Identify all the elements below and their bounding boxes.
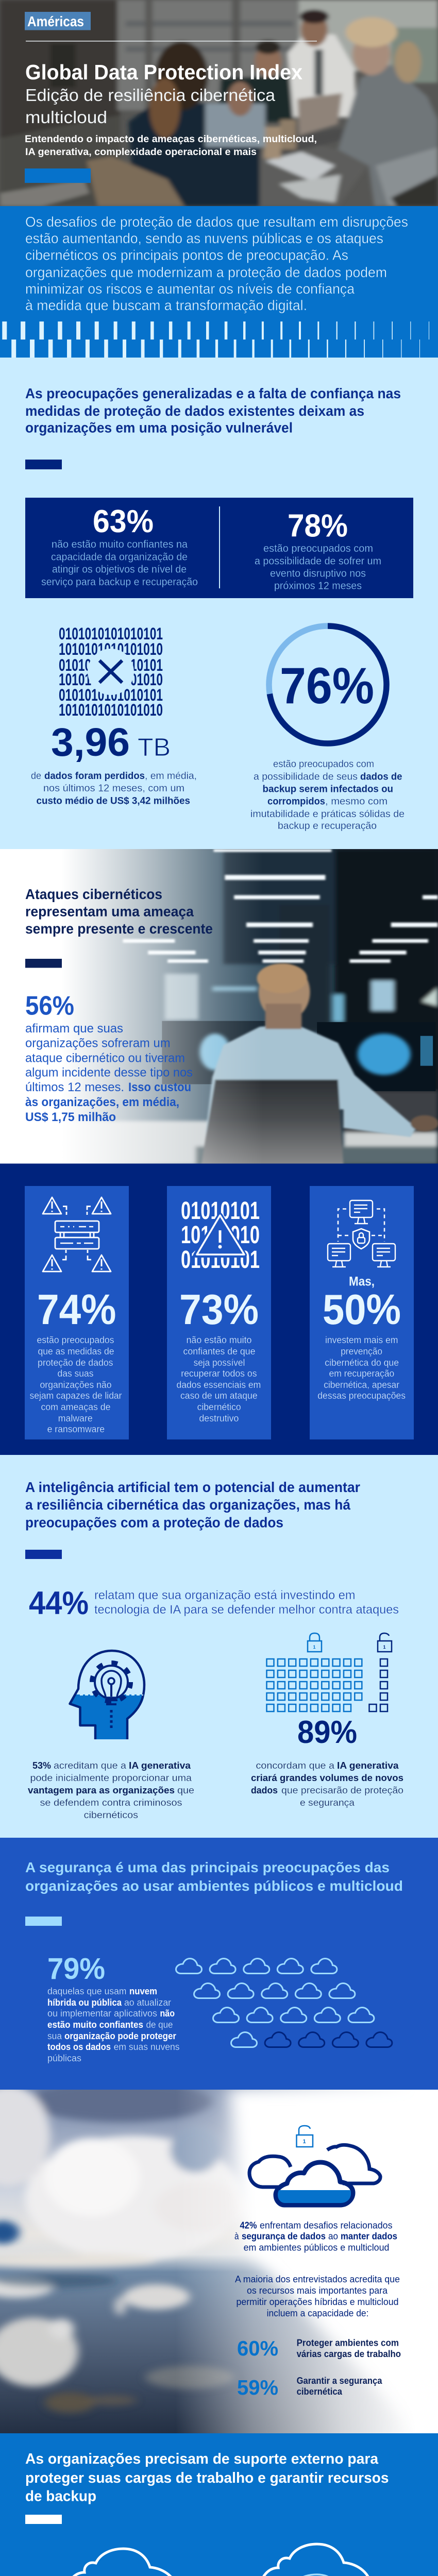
caption: 76%: imutabilidade e práticas sólidas de	[250, 808, 405, 820]
section heading: proteger suas cargas de trabalho e garantir recursos	[25, 2470, 389, 2486]
hero photo: team meeting around a table	[0, 0, 438, 206]
stat caption: 79%: organização pode proteger	[64, 2030, 176, 2041]
text: 89% generative AI: concordam que a	[256, 1760, 335, 1771]
stat caption: 79%: híbrida ou pública	[47, 1997, 122, 2008]
panel: navy band with three stat cards	[0, 1163, 438, 1455]
stat caption: 79%: ao atualizar	[124, 1997, 171, 2008]
stat: 3,96 TB: custo médio de US$ 3,42 milhões	[36, 795, 190, 807]
intro paragraph: organizações que modernizam a proteção de dados podem	[25, 264, 387, 280]
icon: binary data with X: 0101010101010101	[59, 624, 163, 643]
card: 73% recovery confidence: 73%	[179, 1285, 259, 1333]
text: 53% generative AI: pode inicialmente proporcionar uma	[30, 1772, 192, 1783]
stat: 44%: tecnologia de IA para se defender melhor contra ataques	[94, 1603, 399, 1617]
panel: artificial intelligence section	[0, 1455, 438, 1838]
panel: cyber attacks text over photo	[25, 886, 213, 1124]
card: 50% prevention investment: em recuperação	[329, 1368, 394, 1379]
text: 53% generative AI: que	[177, 1785, 194, 1795]
text: 53% generative AI: vantagem para as organizações	[28, 1785, 175, 1795]
card: 50% prevention investment	[310, 1186, 414, 1439]
text: 42% data security: em ambientes públicos e multicloud	[244, 2242, 390, 2253]
card: 73% recovery confidence: destrutivo	[199, 1413, 239, 1423]
card: 50% prevention investment: Mas,	[349, 1275, 375, 1289]
stat: 59% cyber security	[237, 2376, 382, 2399]
section heading: sempre presente e crescente	[25, 921, 213, 937]
stat caption: 79%: ou implementar aplicativos	[47, 2008, 157, 2019]
text: 89% generative AI: e segurança	[300, 1797, 355, 1808]
text: 42% data security: 42%	[240, 2219, 257, 2231]
stat caption: 56%: algum incidente desse tipo nos	[25, 1066, 193, 1080]
stat box: 63% and 78%: estão preocupados com	[263, 543, 373, 554]
intro paragraph	[25, 214, 408, 313]
icon: locked padlock	[308, 1633, 322, 1652]
hero title block: Global Data Protection Index	[25, 60, 302, 84]
stat: 44%	[29, 1585, 399, 1621]
text: 89% generative AI: criará grandes volumes de novos	[251, 1772, 403, 1783]
section heading	[25, 385, 401, 436]
icon: binary data with warning triangle: 01010101	[181, 1197, 260, 1225]
section heading: A inteligência artificial tem o potencial de aumentar	[25, 1479, 360, 1495]
card: 50% prevention investment: dessas preocupações	[317, 1390, 406, 1401]
intro paragraph: cibernéticos os principais pontos de preocupação. As	[25, 247, 348, 263]
ring chart: 76%	[269, 626, 386, 743]
text: 53% generative AI: IA generativa	[129, 1760, 191, 1771]
stat caption: 79%: daquelas que usam	[47, 1986, 127, 1996]
icon: binary data with warning triangle	[181, 1197, 260, 1274]
stat caption: 79%: nuvem	[129, 1986, 157, 1996]
blue hero accent block	[25, 168, 91, 183]
icon: open padlock over clouds: 1	[303, 2139, 306, 2145]
text: 42% data security	[234, 2219, 397, 2253]
card: 74% malware: proteção de dados	[38, 1357, 113, 1368]
caption: 76%	[250, 758, 405, 832]
hero title block	[25, 60, 317, 158]
photo: aerial view of clouds and landscape	[0, 2080, 438, 2433]
text: 53% generative AI: cibernéticos	[84, 1809, 138, 1820]
intro paragraph: Os desafios de proteção de dados que resultam em disrupções	[25, 214, 408, 230]
caption: 76%: estão preocupados com	[273, 758, 374, 770]
stat caption: 56%: organizações sofreram um	[25, 1037, 170, 1050]
hero title block: Edição de resiliência cibernética	[25, 86, 276, 105]
icon: unlocked padlock: 1	[383, 1645, 386, 1650]
icon: binary data with X	[59, 624, 163, 719]
stat caption: 56%: afirmam que suas	[25, 1022, 123, 1036]
icon: binary data with X: 1010101010101010	[59, 701, 163, 719]
panel: external support section	[0, 2433, 438, 2576]
panel: intro blue band	[0, 206, 438, 358]
icon: cloud with document	[67, 2549, 177, 2576]
section heading: A segurança é uma das principais preocupações das	[25, 1859, 390, 1875]
section heading	[25, 886, 213, 937]
stat: 56%: 56%	[25, 991, 74, 1021]
section heading	[25, 1859, 403, 1894]
section heading: preocupações com a proteção de dados	[25, 1515, 283, 1530]
card: 50% prevention investment: cibernética, apesar	[324, 1379, 399, 1390]
caption: 76%: a possibilidade de seus	[254, 771, 358, 782]
section heading: As preocupações generalizadas e a falta de confiança nas	[25, 385, 401, 401]
icon: locked padlock: 1	[313, 1645, 316, 1650]
stat: 60% protect environments: várias cargas de trabalho	[297, 2349, 401, 2359]
card: 74% malware: das suas	[58, 1368, 94, 1379]
stat: 3,96 TB: 3,96	[51, 720, 130, 765]
card: 74% malware: que as medidas de	[38, 1346, 114, 1357]
section heading: medidas de proteção de dados existentes deixam as	[25, 403, 364, 419]
card: 74% malware	[25, 1186, 129, 1439]
text: 53% generative AI: 53%	[32, 1760, 51, 1771]
data center photo: analyst at monitors	[0, 849, 438, 1166]
card: 74% malware: sejam capazes de lidar	[30, 1390, 122, 1401]
icon: binary data with X: 0101010101010101	[59, 686, 163, 704]
caption: 76%: backup serem infectados ou	[263, 783, 393, 794]
icon: binary data with warning triangle: 01010101	[181, 1246, 260, 1274]
text: 42% data security: segurança de dados	[242, 2230, 326, 2241]
ring chart: 76%: 76%	[280, 657, 374, 714]
stat: 44%: relatam que sua organização está investindo em	[94, 1588, 356, 1602]
card: 73% recovery confidence: não estão muito	[187, 1334, 251, 1345]
section heading: As organizações precisam de suporte externo para	[25, 2451, 379, 2467]
card: 73% recovery confidence: recuperar todos os	[181, 1368, 257, 1379]
text: key capabilities intro	[235, 2274, 400, 2318]
section heading	[25, 2451, 389, 2505]
text: key capabilities intro: incluem a capacidade de:	[267, 2308, 369, 2318]
card: 74% malware: 74%	[37, 1285, 116, 1333]
text: 89% generative AI: que precisarão de proteção	[281, 1785, 403, 1795]
section heading: representam uma ameaça	[25, 904, 194, 920]
stat: 3,96 TB: de	[31, 770, 41, 782]
card: 73% recovery confidence	[167, 1186, 271, 1439]
stat: 3,96 TB: TB	[138, 734, 171, 761]
stat caption: 79%: em suas nuvens	[114, 2041, 180, 2052]
text: 89% generative AI: dados	[251, 1785, 278, 1795]
icon: binary data with X: 1010101010101010	[59, 670, 163, 689]
stat: 60% protect environments: 60%	[237, 2336, 278, 2360]
stat box: 63% and 78%: serviço para backup e recuperação	[41, 576, 198, 588]
intro paragraph: estão aumentando, sendo as nuvens públicas e os ataques	[25, 230, 383, 246]
card: 74% malware: estão preocupados	[37, 1334, 114, 1345]
stat: 89%: 89%	[297, 1715, 357, 1750]
card: 73% recovery confidence: seja possível	[194, 1357, 245, 1368]
caption: 76%: , mesmo com	[325, 796, 388, 807]
stat box: 63% and 78%: evento disruptivo nos	[270, 568, 366, 580]
region tag: Américas: Américas	[27, 13, 84, 29]
stat: 3,96 TB	[31, 720, 197, 807]
text: 42% data security: ao	[328, 2230, 338, 2241]
stat box: 63% and 78%: 63%	[93, 504, 154, 539]
card: 74% malware: e ransomware	[47, 1423, 105, 1434]
stat caption: 56%: às organizações, em média,	[25, 1095, 179, 1109]
icon: binary data with X: 1010101010101010	[59, 640, 163, 658]
stat: 59% cyber security: 59%	[237, 2376, 278, 2399]
stat caption: 79%: todos os dados	[47, 2041, 111, 2052]
panel: cloud challenges text	[234, 2126, 401, 2399]
panel: vulnerable position section	[0, 358, 438, 849]
stat box: 63% and 78%: 78%	[288, 508, 348, 544]
intro paragraph: minimizar os riscos e aumentar os níveis de confiança	[25, 281, 355, 297]
icon: open padlock over clouds	[297, 2126, 313, 2147]
chart: cloud pictogram 79% of 20	[176, 1959, 392, 2047]
card: 74% malware: organizações não	[40, 1379, 111, 1390]
stat: 44%: 44%	[29, 1585, 89, 1621]
icon: monitors with shield network	[328, 1200, 395, 1267]
stat caption: 79%: não	[160, 2008, 175, 2019]
stat box: 63% and 78%: atingir os objetivos de nível de	[52, 564, 187, 575]
card: 73% recovery confidence: confiantes de que	[183, 1346, 256, 1357]
caption: 76%: corrompidos	[267, 796, 325, 807]
stat caption: 56%: Isso custou	[128, 1080, 191, 1094]
stat: 60% protect environments: Proteger ambientes com	[297, 2338, 399, 2348]
text: key capabilities intro: permitir operações híbridas e multicloud	[236, 2296, 399, 2307]
intro paragraph: à medida que buscam a transformação digital.	[25, 297, 307, 313]
panel: security in public and multicloud section	[0, 1838, 438, 2090]
hero title block: Entendendo o impacto de ameaças cibernéticas, multicloud,	[25, 133, 317, 145]
card: 73% recovery confidence: dados essenciais em	[176, 1379, 261, 1390]
stat caption: 79%: estão muito confiantes	[47, 2019, 143, 2030]
stat caption: 56%: ataque cibernético ou tiveram	[25, 1052, 185, 1065]
stat caption: 56%: últimos 12 meses.	[25, 1080, 124, 1094]
stat caption: 56%: US$ 1,75 milhão	[25, 1110, 116, 1124]
icon: three clouds, front cloud partly filled	[249, 2145, 380, 2205]
stat caption: 79%: sua	[47, 2030, 62, 2041]
stat box: 63% and 78%: não estão muito confiantes na	[52, 538, 188, 550]
icon: binary data with warning triangle: 10101010	[181, 1222, 260, 1249]
text: 42% data security: à	[234, 2230, 239, 2241]
text: 53% generative AI: se defendem contra criminosos	[40, 1797, 182, 1808]
card: 50% prevention investment: prevenção	[341, 1346, 382, 1357]
stat box: 63% and 78%: a possibilidade de sofrer um	[255, 555, 381, 567]
card: 74% malware: malware	[58, 1413, 93, 1423]
text: 53% generative AI: acreditam que a	[54, 1760, 127, 1771]
chart: waffle of 89% squares	[267, 1659, 388, 1711]
caption: 76%: backup e recuperação	[278, 820, 377, 832]
text: 89% generative AI	[251, 1760, 403, 1808]
stat caption: 79%: de que	[146, 2019, 173, 2030]
section heading: de backup	[25, 2488, 96, 2505]
hero title block: multicloud	[25, 108, 107, 127]
text: key capabilities intro: os recursos mais importantes para	[247, 2285, 388, 2296]
card: 73% recovery confidence: caso de um ataque	[180, 1390, 258, 1401]
stat: 59% cyber security: Garantir a segurança	[297, 2376, 382, 2386]
card: 50% prevention investment: 50%	[323, 1285, 401, 1333]
hero title block: IA generativa, complexidade operacional e mais	[25, 146, 257, 158]
text: 89% generative AI: IA generativa	[337, 1760, 399, 1771]
stat: 3,96 TB: dados foram perdidos	[44, 770, 145, 782]
section heading: organizações em uma posição vulnerável	[25, 419, 293, 436]
text: key capabilities intro: A maioria dos entrevistados acredita que	[235, 2274, 400, 2284]
icon: head with gear and light bulb	[70, 1651, 144, 1739]
icon: binary data with X: 0101010101010101	[59, 656, 163, 674]
icon: servers with warnings	[43, 1197, 111, 1272]
stat box: 63% and 78%: próximos 12 meses	[274, 580, 362, 592]
stat box: 63% and 78%: capacidade da organização de	[51, 551, 188, 563]
icon: cloud with recovery arrows	[261, 2544, 371, 2576]
text: 42% data security: enfrentam desafios relacionados	[260, 2219, 393, 2231]
icon: unlocked padlock	[378, 1633, 392, 1652]
section heading: a resiliência cibernética das organizações, mas há	[25, 1497, 351, 1513]
stat box: 63% and 78%	[25, 498, 413, 598]
section heading: Ataques cibernéticos	[25, 886, 162, 902]
card: 50% prevention investment: cibernética do que	[325, 1357, 399, 1368]
card: 50% prevention investment: investem mais em	[325, 1334, 398, 1345]
stat: 3,96 TB: , em média,	[145, 770, 197, 782]
stat caption: 56%	[25, 1022, 193, 1124]
card: 73% recovery confidence: cibernético	[197, 1401, 241, 1412]
stat caption: 79%: públicas	[47, 2053, 81, 2063]
stat: 59% cyber security: cibernética	[297, 2386, 343, 2397]
stat: 79%: 79%	[47, 1952, 105, 1986]
caption: 76%: dados de	[360, 771, 402, 782]
section heading	[25, 1479, 360, 1530]
text: 42% data security: manter dados	[341, 2230, 397, 2241]
stat: 60% protect environments	[237, 2336, 401, 2360]
stat caption: 79%	[47, 1986, 180, 2063]
text: 53% generative AI	[28, 1760, 194, 1820]
card: 74% malware: com ameaças de	[41, 1401, 110, 1412]
stat: 3,96 TB: nos últimos 12 meses, com um	[43, 783, 184, 794]
section heading: organizações ao usar ambientes públicos e multicloud	[25, 1878, 403, 1894]
